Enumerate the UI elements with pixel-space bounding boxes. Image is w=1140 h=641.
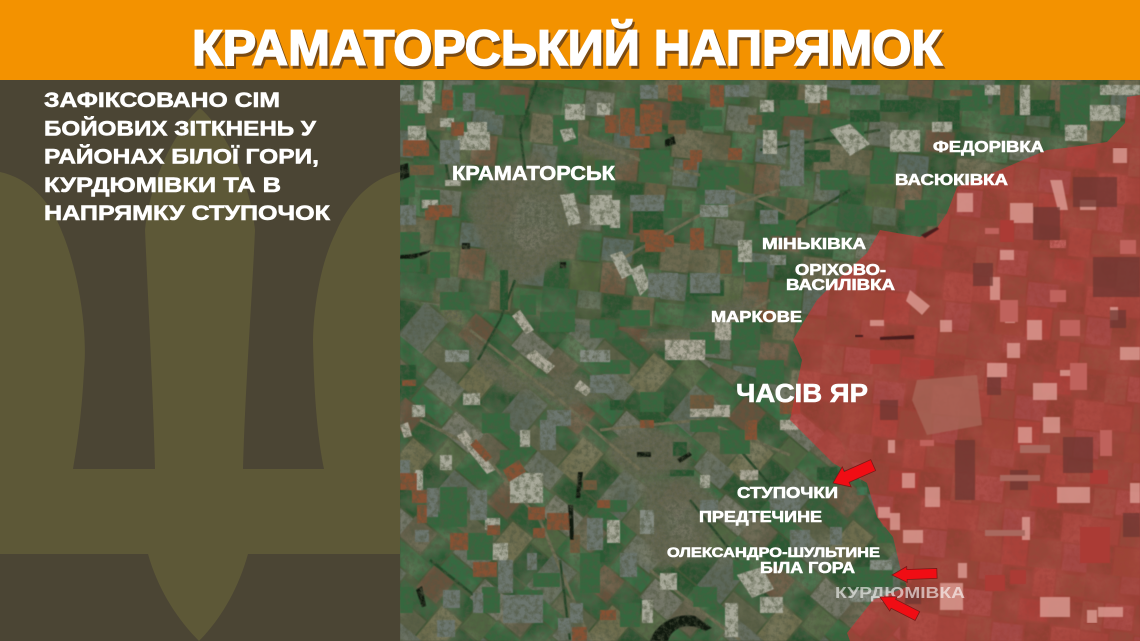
icon: trident emblem <box>0 108 400 641</box>
text block: situation summary <box>44 88 331 225</box>
occupied zone overlay: red area <box>790 95 1140 641</box>
map labels: settlements: ФЕДОРІВКА <box>933 139 1044 156</box>
arrow: Біла Гора <box>892 565 937 583</box>
map labels: settlements: ОРІХОВО- <box>795 262 886 279</box>
urban and ravine areas <box>430 135 760 570</box>
map labels: settlements: КУРДЮМІВКА <box>835 585 966 602</box>
black water bodies <box>400 136 712 641</box>
text block: situation summary: НАПРЯМКУ СТУПОЧОК <box>44 201 331 225</box>
map labels: settlements <box>452 139 1044 602</box>
green fields <box>400 85 1090 627</box>
map labels: settlements: БІЛА ГОРА <box>760 560 855 577</box>
fields inside occupied zone <box>855 148 1140 623</box>
map labels: settlements: ВАСИЛІВКА <box>786 277 895 294</box>
text block: situation summary: БОЙОВИХ ЗІТКНЕНЬ У <box>44 116 317 140</box>
map labels: settlements: КРАМАТОРСЬК <box>452 163 616 185</box>
map: satellite terrain with occupied zone <box>400 80 1140 641</box>
panel: left text panel with trident <box>0 80 400 641</box>
brown and orange fields <box>400 85 830 641</box>
text block: situation summary: РАЙОНАХ БІЛОЇ ГОРИ, <box>44 144 319 168</box>
roads and hedgerows <box>420 133 790 640</box>
map labels: settlements: ОЛЕКСАНДРО-ШУЛЬТИНЕ <box>667 544 880 560</box>
arrow: Ступочки <box>829 455 878 493</box>
title: КРАМАТОРСЬКИЙ НАПРЯМОК <box>194 22 944 79</box>
text block: situation summary: КУРДЮМІВКИ ТА В <box>44 173 281 197</box>
map labels: settlements: ЧАСІВ ЯР <box>736 378 868 408</box>
map labels: settlements: МАРКОВЕ <box>711 309 802 326</box>
map labels: settlements: ПРЕДТЕЧИНЕ <box>699 509 822 526</box>
white fields <box>408 81 1140 637</box>
map labels: settlements: МІНЬКІВКА <box>762 236 866 253</box>
map labels: settlements: СТУПОЧКИ <box>737 485 838 502</box>
grey fields <box>400 85 880 637</box>
header bar <box>0 0 1140 80</box>
map labels: settlements: ВАСЮКІВКА <box>895 172 1009 189</box>
text block: situation summary: ЗАФІКСОВАНО СІМ <box>44 88 280 112</box>
title: КРАМАТОРСЬКИЙ НАПРЯМОК <box>192 19 942 76</box>
arrow: Курдюмівка <box>876 590 921 623</box>
